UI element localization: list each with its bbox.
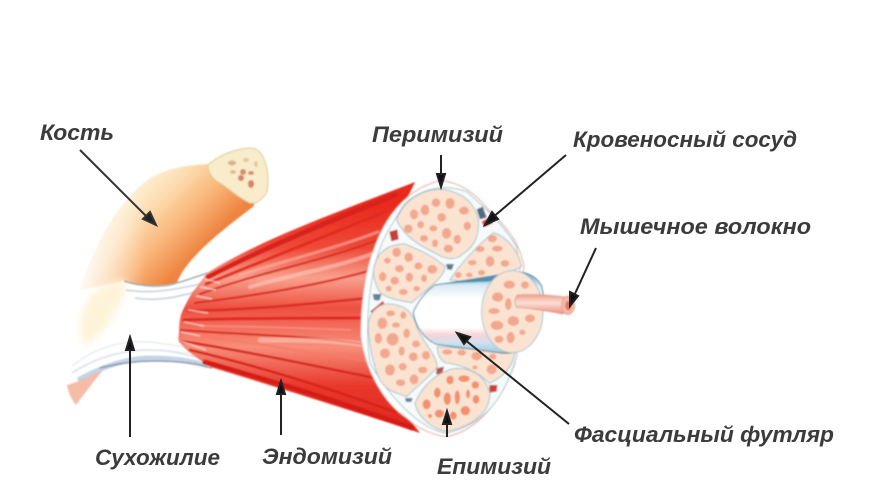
fascicle lower left xyxy=(368,304,437,397)
arrow: Эндомизий xyxy=(277,381,285,435)
arrow: Перимизий xyxy=(437,155,445,187)
cross-section xyxy=(361,181,575,437)
vessels xyxy=(370,207,497,402)
bone cut end xyxy=(208,148,268,203)
single muscle fiber xyxy=(515,295,575,315)
label: Эндомизий: Эндомизий xyxy=(262,444,393,469)
label: Епимизий: Епимизий xyxy=(437,454,552,479)
arrow: Мышечное волокно xyxy=(570,248,596,306)
label: Сухожилие: Сухожилие xyxy=(95,445,220,470)
arrow: Епимизий xyxy=(443,411,451,437)
label: Перимизий: Перимизий xyxy=(372,122,504,147)
muscle belly xyxy=(178,182,420,433)
fascicle upper right xyxy=(450,233,522,282)
arrow: Кровеносный сосуд xyxy=(485,155,566,225)
arrow: Фасциальный футляр xyxy=(457,333,569,424)
tendon xyxy=(66,272,212,405)
label: Кровеносный сосуд: Кровеносный сосуд xyxy=(573,127,797,152)
fascicle end face xyxy=(482,271,543,353)
tendon lower tail xyxy=(67,370,103,405)
label: Мышечное волокно: Мышечное волокно xyxy=(580,214,811,239)
label: Кость: Кость xyxy=(40,120,114,145)
pulled-out fascicle in fascial sheath xyxy=(413,271,575,353)
fascicle bottom xyxy=(415,368,490,432)
muscle fringe at tendon xyxy=(178,279,220,350)
bone xyxy=(70,148,268,300)
label: Фасциальный футляр: Фасциальный футляр xyxy=(574,422,834,447)
fascicle top xyxy=(397,189,478,259)
fascicle left xyxy=(373,244,445,303)
fascicle lower right xyxy=(437,347,515,383)
arrow: Кость xyxy=(80,150,156,225)
arrow: Сухожилие xyxy=(126,337,134,437)
outer sheath xyxy=(361,181,524,437)
